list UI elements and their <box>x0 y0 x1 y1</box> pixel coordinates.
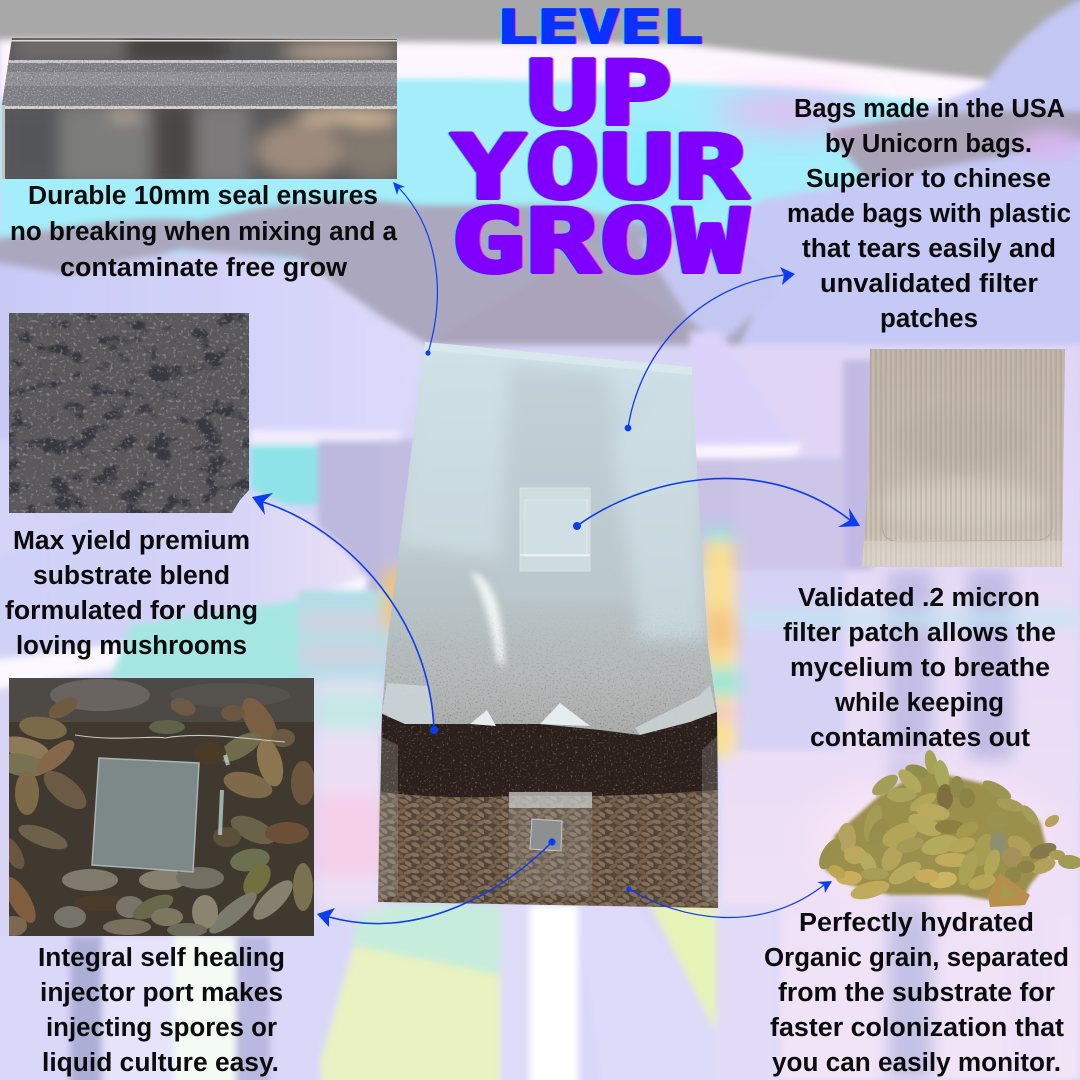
bag upper film <box>378 340 720 742</box>
substrate layer <box>380 712 718 798</box>
text: filter patch <box>783 584 1056 752</box>
text: filter patch: filter patch allows the <box>783 619 1056 647</box>
text: substrate: formulated for dung <box>5 597 258 625</box>
sky <box>0 60 1080 260</box>
arrow: organic grain callout <box>626 881 832 918</box>
text: filter patch: while keeping <box>834 689 1004 717</box>
text: filter patch: Validated .2 micron <box>798 584 1040 612</box>
text: injector port <box>38 944 285 1077</box>
text: substrate <box>5 527 258 660</box>
text: usa made bags: unvalidated filter <box>820 270 1038 298</box>
text: substrate: substrate blend <box>33 562 230 590</box>
product: mushroom grow bag <box>378 340 720 908</box>
left brim and stems <box>250 430 402 445</box>
arrow: usa bags callout <box>625 267 795 431</box>
panel: filter patch photo <box>860 349 1066 569</box>
text: filter patch: mycelium to breathe <box>790 654 1050 682</box>
text: organic grain: faster colonization that <box>770 1014 1065 1042</box>
arrow: substrate callout <box>252 493 438 734</box>
text: seal: no breaking when mixing and a <box>10 218 398 246</box>
text: substrate: loving mushrooms <box>16 632 247 660</box>
upper filter patch <box>520 488 590 571</box>
lower right <box>735 458 845 570</box>
text: substrate: Max yield premium <box>13 527 250 555</box>
text: organic grain: Perfectly hydrated <box>799 909 1034 937</box>
title line: grow: GROW <box>451 190 748 293</box>
grain layer <box>378 735 718 908</box>
bag highlights over soil <box>470 703 590 726</box>
text: usa made bags: made bags with plastic <box>787 200 1071 228</box>
text: usa made bags: patches <box>880 305 978 333</box>
text: organic grain: Organic grain, separated <box>764 944 1069 972</box>
text: seal: Durable 10mm seal ensures <box>28 182 378 210</box>
text: seal <box>10 182 398 282</box>
lower left iridescent <box>110 600 300 680</box>
panel: injector port photo <box>0 678 315 939</box>
text: seal: contaminate free grow <box>60 254 347 282</box>
panel: seal photo <box>0 36 410 185</box>
arrow: filter patch callout <box>573 478 860 530</box>
title line: up: UP <box>526 42 672 145</box>
right small cap <box>690 345 850 465</box>
text: injector port: liquid culture easy. <box>42 1049 279 1077</box>
text: filter patch: contaminates out <box>810 724 1031 752</box>
center mountain <box>425 255 710 345</box>
arrow: injector port callout <box>317 838 556 927</box>
text: organic grain <box>764 909 1069 1077</box>
lower right base <box>720 345 1080 1080</box>
title line: level: LEVEL <box>496 0 703 54</box>
text: organic grain: you can easily monitor. <box>772 1049 1061 1077</box>
text: injector port: injector port makes <box>40 979 283 1007</box>
iridescent band <box>0 30 1000 112</box>
right caps <box>870 0 1080 130</box>
arrow: seal callout <box>393 182 437 356</box>
panel: substrate photo <box>9 313 249 513</box>
lower injector patch <box>509 792 592 894</box>
text: usa made bags: Superior to chinese <box>806 165 1051 193</box>
text: usa made bags: that tears easily and <box>802 235 1056 263</box>
title <box>451 0 748 293</box>
text: usa made bags: Bags made in the USA <box>794 95 1065 123</box>
text: injector port: injecting spores or <box>46 1014 277 1042</box>
text: injector port: Integral self healing <box>38 944 285 972</box>
text: usa made bags <box>787 95 1071 333</box>
title line: your: YOUR <box>451 116 748 219</box>
text: usa made bags: by Unicorn bags. <box>825 130 1032 158</box>
bottom left panel <box>0 936 340 1080</box>
bag shoulders <box>382 683 716 735</box>
left cap <box>0 253 428 440</box>
panel: hydrated grain pile <box>815 749 1080 907</box>
text: organic grain: from the substrate for <box>778 979 1055 1007</box>
left gray arc <box>0 200 770 345</box>
bottom center <box>270 905 780 1080</box>
